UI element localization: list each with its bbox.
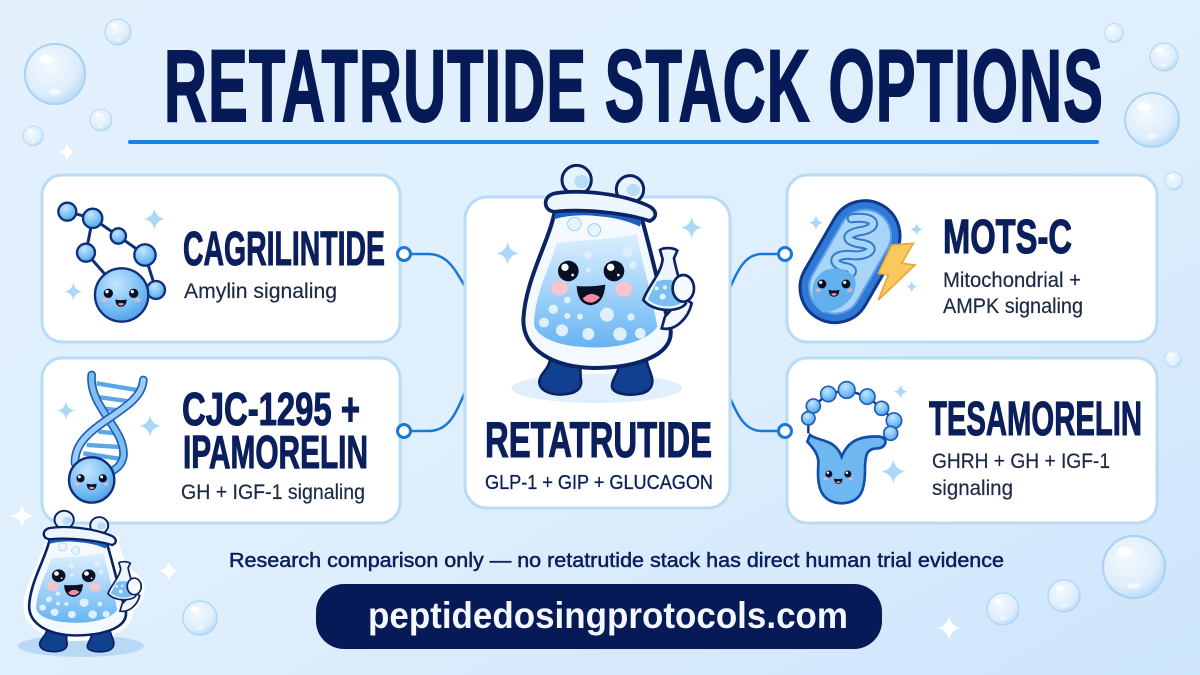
text: ghrh + gh + igf-1 signaling: GHRH + GH + IGF-1 — [932, 450, 1110, 473]
panel: cjc-1295 + ipamorelin — [42, 358, 400, 523]
text: ghrh + gh + igf-1 signaling: signaling — [932, 477, 1013, 500]
heading: ipamorelin: IPAMORELIN — [183, 426, 368, 478]
panel: mots-c — [787, 175, 1157, 342]
heading: retatrutide: RETATRUTIDE — [485, 412, 712, 468]
panel: retatrutide — [465, 165, 730, 508]
icon: flask mascot — [496, 165, 702, 403]
text: mitochondrial + ampk signaling: AMPK signaling — [943, 295, 1083, 318]
text: mitochondrial + ampk signaling — [943, 269, 1083, 318]
connector: cagrilintide to retatrutide — [398, 248, 466, 288]
text: mitochondrial + ampk signaling: Mitochondrial + — [943, 269, 1081, 292]
website pill: peptidedosingprotocols.com — [368, 595, 848, 636]
text: gh + igf-1 signaling: GH + IGF-1 signaling — [181, 481, 365, 504]
panel: cagrilintide — [42, 175, 400, 342]
text: amylin signaling: Amylin signaling — [184, 279, 337, 303]
heading: cjc-1295 +: CJC-1295 + — [182, 383, 360, 435]
connector: mots-c to retatrutide — [730, 248, 792, 288]
icon: peptide chain mascot — [58, 203, 165, 322]
icon: dna helix mascot — [57, 375, 161, 503]
website pill — [316, 584, 882, 649]
text: ghrh + gh + igf-1 signaling — [932, 450, 1110, 500]
icon: mitochondrion mascot — [787, 188, 923, 335]
heading: cagrilintide: CAGRILINTIDE — [183, 223, 385, 276]
text: glp-1 + gip + glucagon: GLP-1 + GIP + GLUCAGON — [485, 472, 713, 494]
connector: cjc-1295 + ipamorelin to retatrutide — [398, 390, 466, 438]
heading: mots-c: MOTS-C — [943, 211, 1072, 264]
title underline — [128, 140, 1099, 144]
disclaimer: Research comparison only — no retatrutide stack has direct human trial evidence — [229, 549, 1004, 572]
connector: tesamorelin to retatrutide — [730, 398, 792, 438]
panel: tesamorelin — [787, 358, 1157, 523]
icon: tesamorelin mascot — [802, 382, 908, 503]
small flask mascot — [18, 511, 144, 657]
